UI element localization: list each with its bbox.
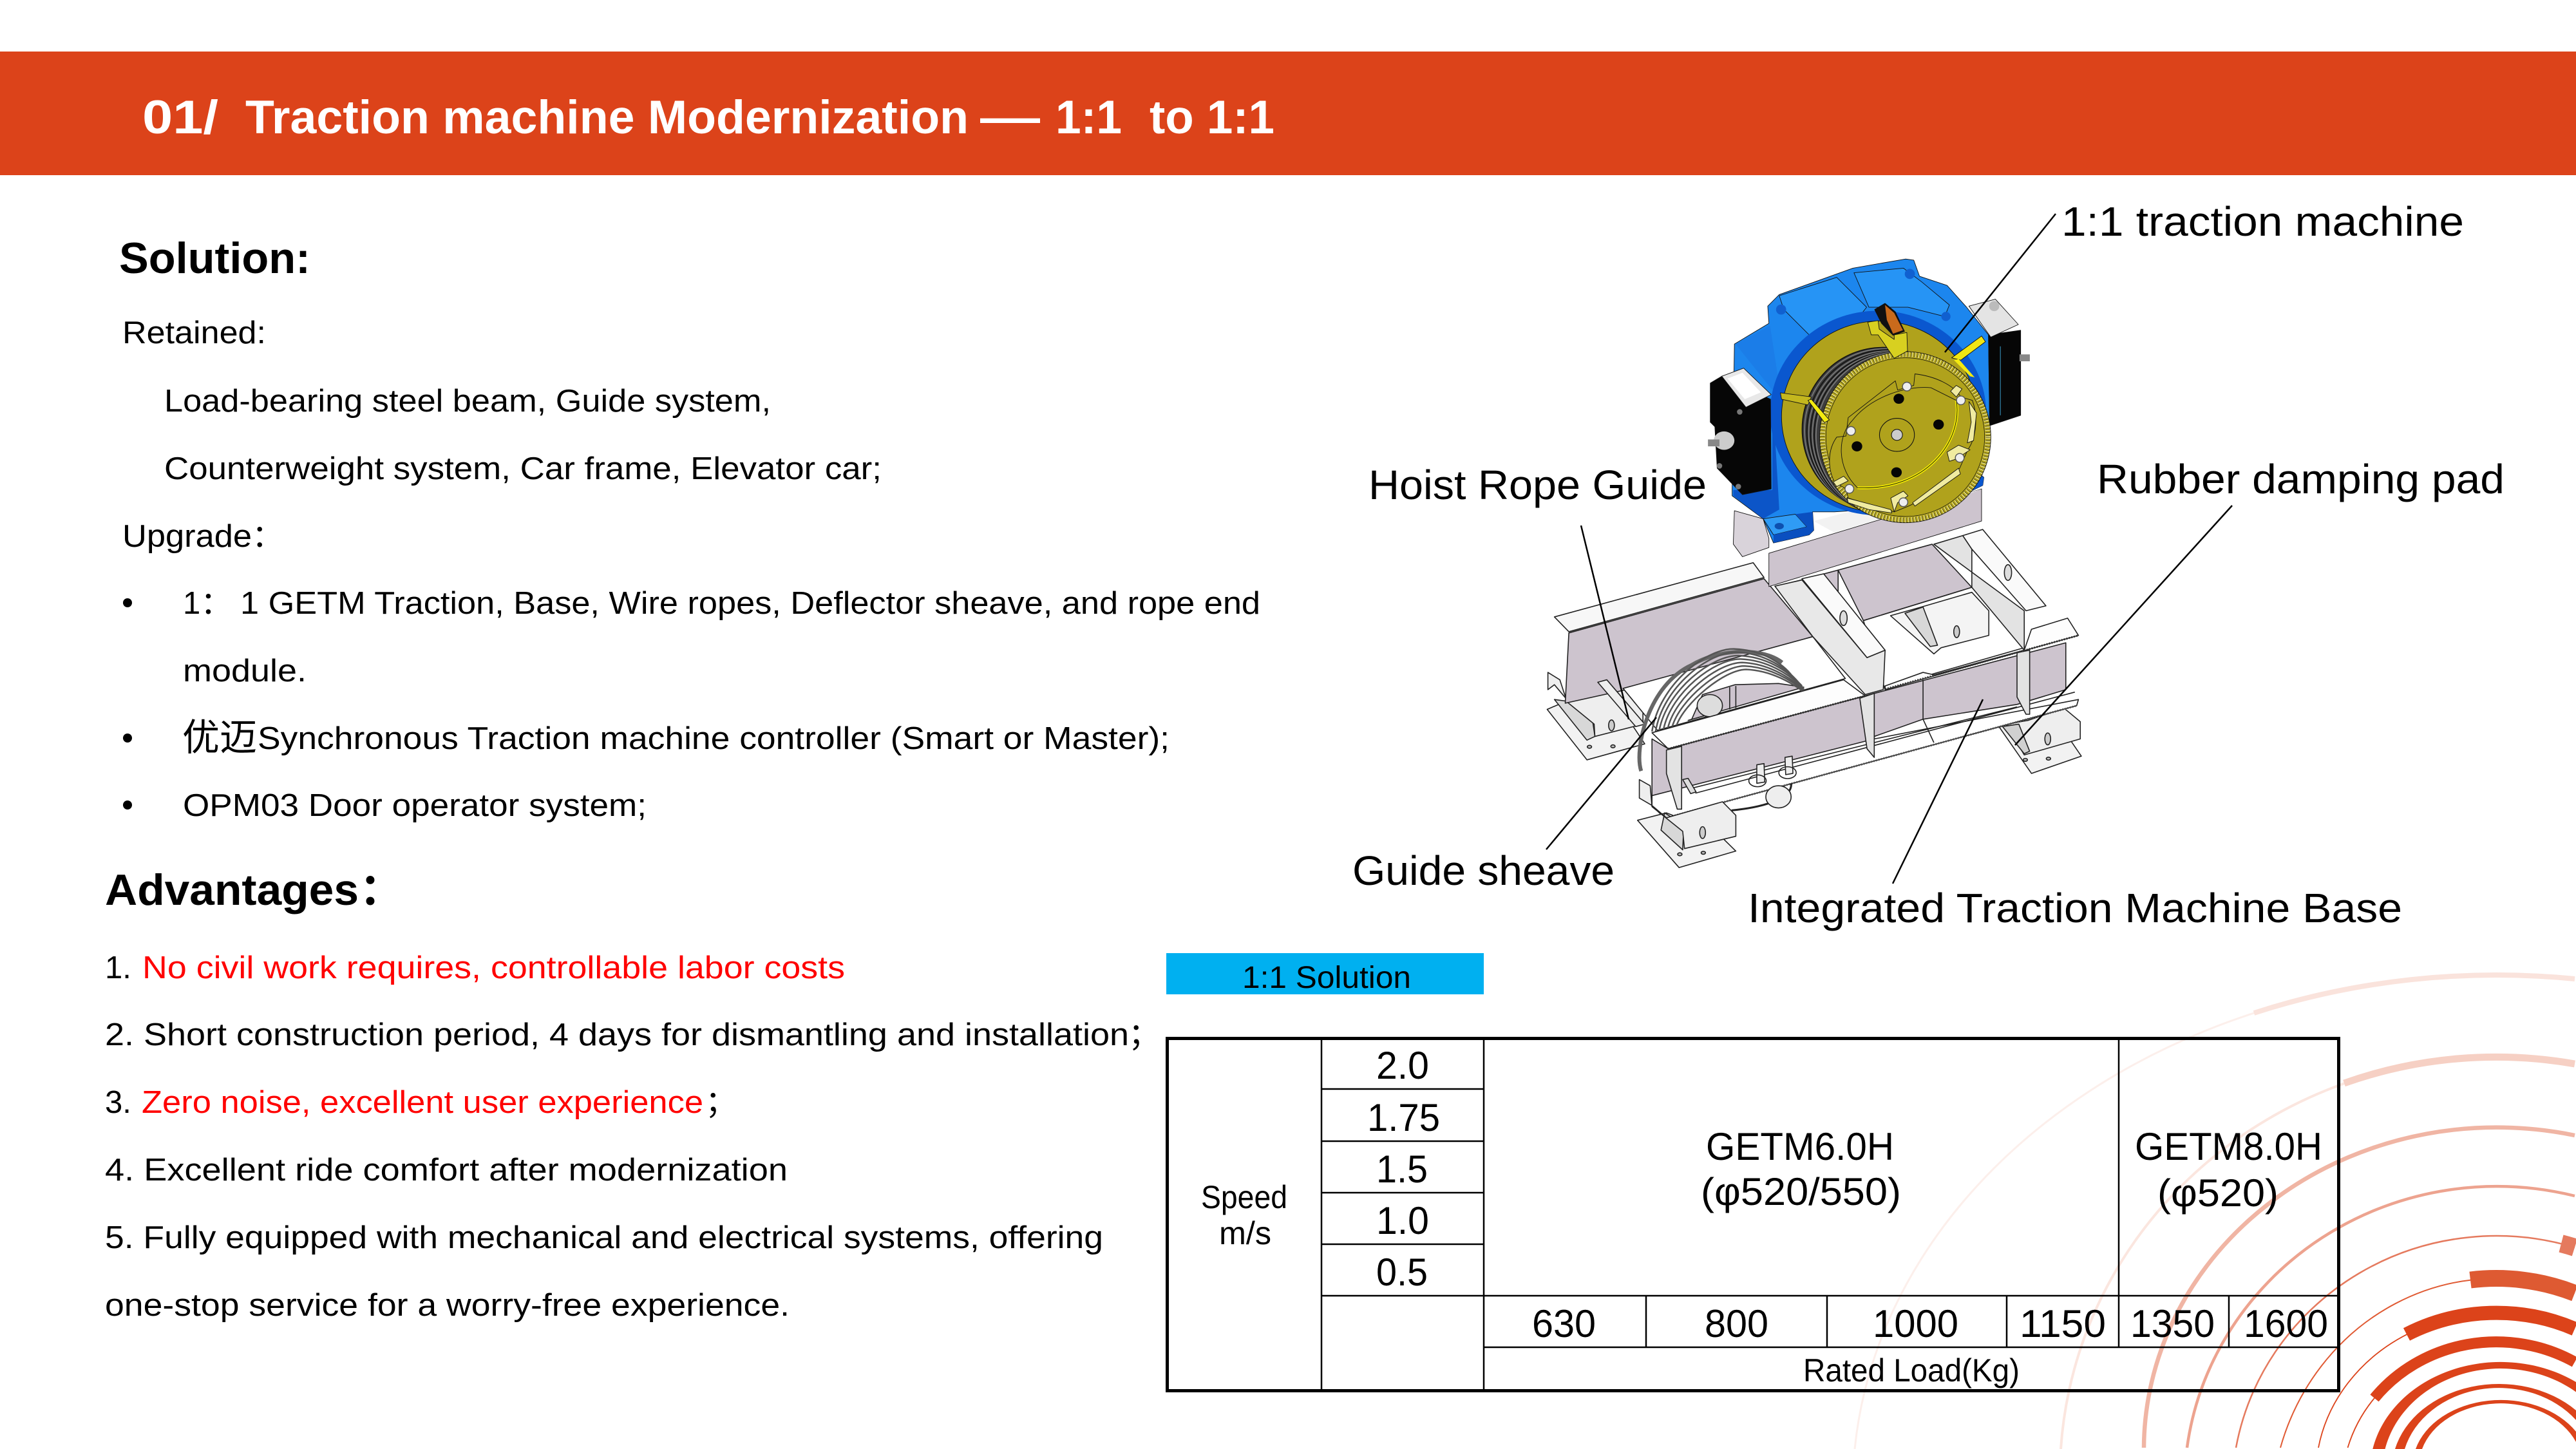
- header band: [0, 52, 2576, 175]
- table row labels: speed: 1.5: [1376, 1148, 1428, 1191]
- text block: advantages list: 2. Short construction period, 4 days for dismantling and installation: [105, 1018, 1129, 1052]
- label: Integrated Traction Machine Base: [1748, 699, 2402, 931]
- label: 1:1 traction machine: [1945, 198, 2464, 352]
- icon: traction sheave back plate: [1781, 321, 1977, 512]
- table cells: models: GETM8.0H: [2135, 1125, 2322, 1168]
- heading: Advantages: Advantages: [105, 866, 359, 914]
- text block: advantages list: No civil work requires, controllable labor costs: [142, 951, 845, 985]
- title: 01/: [142, 91, 218, 144]
- illustration: integrated machine base frame: [1547, 529, 2081, 867]
- text block: solution list: ：: [252, 519, 283, 554]
- text block: solution list: Upgrade: [122, 519, 252, 554]
- text block: solution list: OPM03 Door operator system;: [183, 788, 647, 823]
- icon: machine mounting plate: [1733, 489, 1982, 587]
- table: speed and rated load: [1167, 1038, 2339, 1391]
- title: —: [980, 91, 1040, 144]
- label: Hoist Rope Guide: Hoist Rope Guide: [1368, 462, 1707, 508]
- table column labels: rated load: 1600: [2244, 1302, 2328, 1345]
- text block: advantages list: ；: [705, 1085, 737, 1120]
- icon: right brake box: [1969, 299, 2030, 426]
- text block: solution list: 1 GETM Traction, Base, Wire ropes, Deflector sheave, and rope end: [240, 586, 1260, 621]
- heading: Advantages: ：: [359, 866, 403, 914]
- table column labels: rated load: 800: [1705, 1302, 1768, 1345]
- heading: Solution: Solution:: [119, 234, 310, 283]
- text block: advantages list: 4. Excellent ride comfort after modernization: [105, 1153, 788, 1188]
- illustration: traction machine: [1708, 259, 2030, 587]
- table cells: models: [1701, 1125, 2322, 1215]
- label: Rubber damping pad: Rubber damping pad: [2097, 456, 2505, 502]
- text block: solution list: Synchronous Traction machine controller (Smart or Master);: [258, 721, 1170, 756]
- label: Integrated Traction Machine Base: Integrated Traction Machine Base: [1748, 885, 2402, 931]
- table cells: models: GETM6.0H: [1706, 1125, 1894, 1168]
- label: 1:1 traction machine: 1:1 traction machine: [2061, 198, 2464, 245]
- table cells: models: (φ520): [2157, 1171, 2278, 1215]
- text block: advantages list: 5. Fully equipped with mechanical and electrical systems, offering: [105, 1220, 1103, 1255]
- table row labels: speed: 0.5: [1376, 1251, 1428, 1294]
- table column labels: rated load: 630: [1532, 1302, 1596, 1345]
- text block: solution list: Load-bearing steel beam, Guide system,: [164, 384, 771, 419]
- text block: solution list: Retained:: [122, 316, 266, 350]
- table row labels: speed: 2.0: [1376, 1044, 1429, 1087]
- table cells: models: (φ520/550): [1701, 1170, 1901, 1213]
- title: [142, 91, 1274, 144]
- table row labels: speed: m/s: [1219, 1215, 1271, 1251]
- icon: motor housing: [1732, 259, 1989, 543]
- text block: advantages list: 3.: [105, 1085, 131, 1120]
- table column labels: rated load: [1532, 1302, 2328, 1388]
- tag: 1:1 Solution: [1166, 953, 1484, 995]
- icon: geared sheave front: [1820, 352, 1991, 523]
- label: Guide sheave: Guide sheave: [1352, 848, 1615, 894]
- table column labels: rated load: 1150: [2020, 1302, 2106, 1345]
- table row labels: speed: 1.0: [1376, 1199, 1429, 1242]
- table column labels: rated load: 1350: [2130, 1302, 2215, 1345]
- icon: wire ropes on drum: [1802, 348, 1982, 519]
- text block: advantages list: ；: [1128, 1018, 1160, 1052]
- decorative concentric arcs: [1855, 975, 2576, 1449]
- table column labels: rated load: 1000: [1873, 1302, 1958, 1345]
- tag: 1:1 Solution: 1:1 Solution: [1242, 961, 1411, 995]
- text block: solution list: 1：: [183, 586, 232, 621]
- label: Hoist Rope Guide: [1368, 462, 1707, 719]
- text block: solution list: Counterweight system, Car frame, Elevator car;: [164, 451, 882, 486]
- text block: advantages list: [105, 951, 1160, 1323]
- text block: advantages list: Zero noise, excellent user experience: [142, 1085, 703, 1120]
- label: Guide sheave: [1352, 717, 1656, 894]
- table row labels: speed: 1.75: [1367, 1096, 1440, 1139]
- text block: solution list: module.: [183, 654, 307, 688]
- table row labels: speed: Speed: [1201, 1179, 1287, 1215]
- text block: advantages list: one-stop service for a worry-free experience.: [105, 1288, 790, 1323]
- label: Rubber damping pad: [2015, 456, 2505, 745]
- text block: solution list: 优迈: [182, 717, 257, 759]
- icon: rope guide arms and sensor: [1781, 303, 1985, 422]
- text block: advantages list: 1.: [105, 951, 131, 985]
- icon: left brake box: [1708, 368, 1771, 495]
- text block: solution list: [122, 316, 1260, 823]
- table row labels: speed: [1201, 1044, 1440, 1294]
- title: 1:1: [1056, 91, 1122, 144]
- table column labels: rated load: Rated Load(Kg): [1803, 1352, 2020, 1388]
- title: to 1:1: [1150, 91, 1274, 144]
- title: Traction machine Modernization: [245, 91, 969, 144]
